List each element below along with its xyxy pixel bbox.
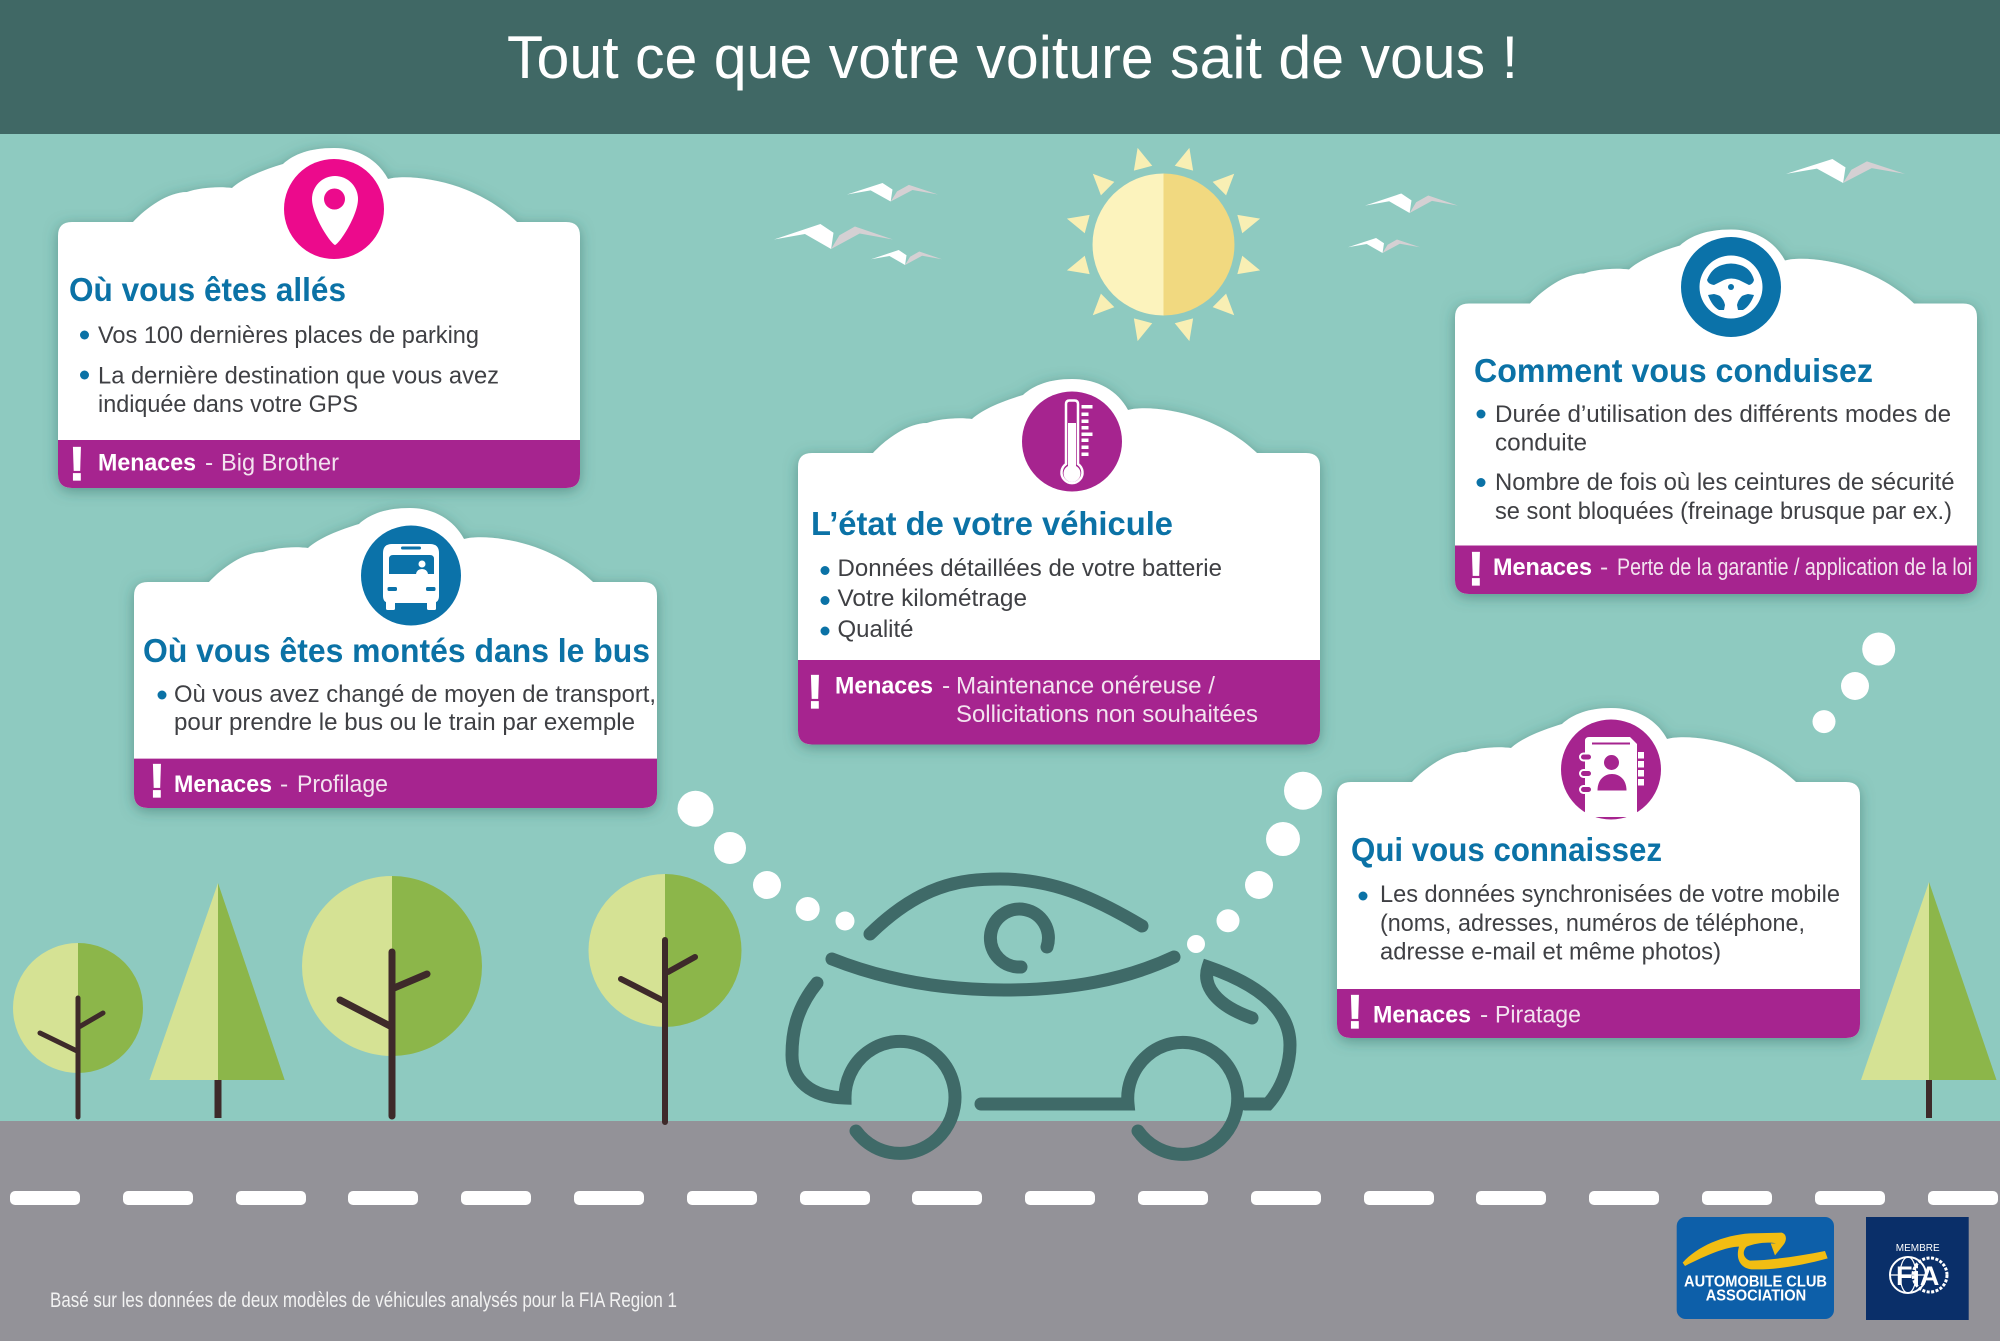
- heading: L’état de votre véhicule: [811, 505, 1173, 542]
- bullet list: indiquée dans votre GPS: [98, 391, 358, 418]
- threat band: [1455, 546, 1977, 594]
- threat text: [69, 437, 339, 490]
- bullet list: Les données synchronisées de votre mobile: [1380, 881, 1840, 908]
- threat text: !: [69, 437, 85, 490]
- icon: thermometer: [1022, 392, 1122, 492]
- bullet list: Durée d’utilisation des différents modes de: [1495, 401, 1951, 428]
- bullet list: [80, 322, 499, 418]
- bullet list: [1476, 401, 1954, 525]
- panel: où vous êtes montés dans le bus: [134, 508, 657, 808]
- threat text: -: [205, 450, 213, 476]
- threat band: [134, 759, 657, 808]
- threat text: [1347, 985, 1581, 1038]
- threat text: -: [1480, 1002, 1488, 1028]
- heading: Où vous êtes montés dans le bus: [143, 632, 650, 669]
- logo: FIA member: MEMBRE: [1896, 1243, 1940, 1254]
- bullet list: (noms, adresses, numéros de téléphone,: [1380, 910, 1805, 937]
- threat text: Menaces: [174, 771, 272, 798]
- threat text: [807, 665, 1258, 728]
- threat text: -: [280, 771, 288, 798]
- title: Tout ce que votre voiture sait de vous !: [507, 24, 1518, 91]
- sun: [1064, 145, 1263, 344]
- threat text: Profilage: [297, 771, 388, 798]
- threat text: !: [149, 754, 165, 807]
- threat text: Big Brother: [221, 450, 339, 476]
- bullet list: pour prendre le bus ou le train par exemple: [174, 709, 635, 736]
- bullet list: La dernière destination que vous avez: [98, 362, 499, 390]
- threat text: !: [1468, 542, 1484, 595]
- thought bubbles right: [1187, 772, 1322, 953]
- threat band: [58, 440, 580, 488]
- threat text: Menaces: [98, 450, 196, 476]
- car line drawing: [792, 879, 1290, 1154]
- trees left: [13, 874, 742, 1122]
- tree 1: [13, 943, 143, 1117]
- logo: automobile club association: AUTOMOBILE CLUB: [1684, 1274, 1827, 1290]
- logo: automobile club association: ASSOCIATION: [1706, 1288, 1806, 1304]
- bullet list: Qualité: [838, 616, 914, 643]
- tree 3: [302, 876, 482, 1116]
- bullet list: Votre kilométrage: [838, 585, 1027, 612]
- thought bubbles left: [678, 791, 854, 930]
- tree 2: [150, 883, 285, 1118]
- heading: Qui vous connaissez: [1351, 831, 1662, 868]
- logo: automobile club association: [1677, 1217, 1834, 1319]
- threat text: Piratage: [1495, 1002, 1581, 1028]
- bullet list: se sont bloquées (freinage brusque par ex.): [1495, 498, 1952, 525]
- icon: bus: [361, 526, 461, 626]
- threat text: Sollicitations non souhaitées: [956, 701, 1258, 728]
- footer source note: Basé sur les données de deux modèles de véhicules analysés pour la FIA Region 1: [50, 1289, 677, 1312]
- bullet list: [158, 681, 656, 736]
- bullet list: adresse e-mail et même photos): [1380, 938, 1721, 966]
- tree 4: [589, 874, 742, 1122]
- header banner: [0, 0, 2000, 134]
- threat text: [149, 754, 388, 807]
- icon: steering wheel: [1681, 237, 1781, 337]
- heading: Où vous êtes allés: [69, 271, 346, 308]
- threat text: -: [1600, 554, 1608, 581]
- panel: qui vous connaissez: [1337, 708, 1860, 1038]
- icon: contact book: [1561, 720, 1661, 820]
- bullet list: Vos 100 dernières places de parking: [98, 322, 479, 349]
- icon: gold swoosh: [1683, 1233, 1828, 1269]
- logo: FIA member: FiA: [1896, 1261, 1939, 1291]
- threat text: !: [1347, 985, 1363, 1038]
- panel: où vous êtes allés: [58, 148, 580, 490]
- threat text: -: [942, 672, 950, 700]
- bullet list: Données détaillées de votre batterie: [838, 555, 1222, 582]
- threat text: !: [807, 665, 823, 718]
- birds: [774, 159, 1905, 265]
- threat text: Maintenance onéreuse /: [956, 672, 1215, 700]
- bullet list: Où vous avez changé de moyen de transport,: [174, 681, 656, 708]
- bullet list: Nombre de fois où les ceintures de sécurité: [1495, 469, 1954, 496]
- icon: location pin: [284, 159, 384, 259]
- threat band: [798, 660, 1320, 744]
- logo: FIA member: [1866, 1217, 1969, 1320]
- threat text: [1468, 542, 1972, 595]
- panel: comment vous conduisez: [1455, 230, 1977, 595]
- panel: l'état de votre véhicule: [798, 379, 1320, 744]
- threat band: [1337, 989, 1860, 1038]
- road: [0, 1121, 2000, 1341]
- bullet list: conduite: [1495, 430, 1587, 456]
- threat text: Menaces: [835, 672, 933, 700]
- tree right: [1861, 882, 1996, 1118]
- thought bubbles top right: [1812, 632, 1895, 733]
- threat text: Menaces: [1373, 1002, 1471, 1028]
- bullet list: [1358, 881, 1840, 966]
- bullet list: [820, 555, 1222, 643]
- heading: Comment vous conduisez: [1474, 352, 1873, 389]
- threat text: Menaces: [1493, 554, 1592, 581]
